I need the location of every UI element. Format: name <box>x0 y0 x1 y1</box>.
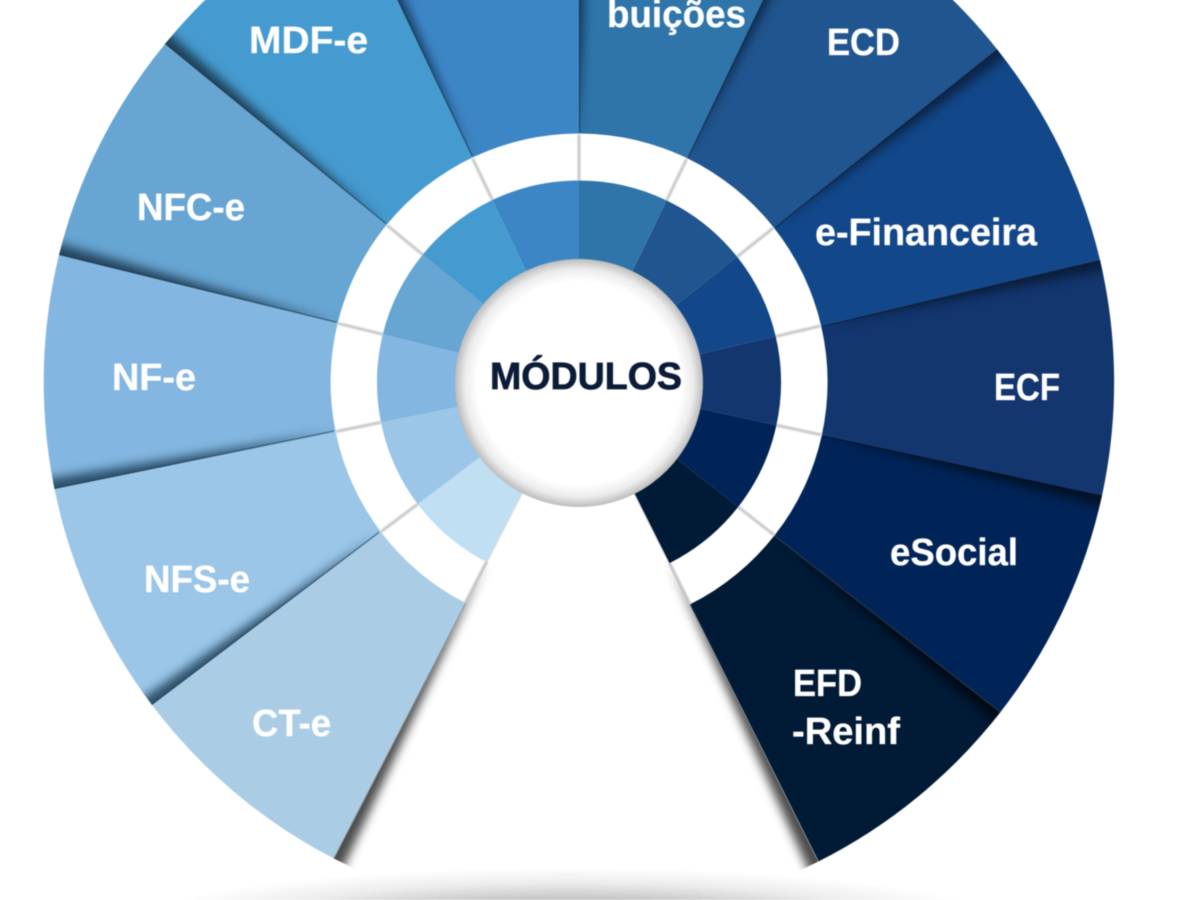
slice: EFD-Reinf: -Reinf <box>792 711 900 753</box>
slice: e-Financeira <box>773 49 1100 326</box>
center hub <box>455 259 703 507</box>
white ring <box>331 133 828 604</box>
slice: MDF-e <box>165 0 473 225</box>
slice: Contribuições <box>579 0 811 159</box>
center hub: MÓDULOS <box>490 354 682 398</box>
slice: CT-e: CT-e <box>252 703 331 745</box>
slice: eSocial: eSocial <box>890 532 1018 574</box>
shadow: edges of open wedge <box>333 493 820 870</box>
slice: NFS-e: NFS-e <box>144 559 250 601</box>
fold shadows between slices <box>26 0 1132 738</box>
ring separator lines <box>336 134 821 604</box>
slice: CT-e <box>152 532 465 858</box>
slice: ECD <box>687 0 997 228</box>
slice: NFS-e <box>54 432 381 705</box>
slice: ECF <box>820 260 1114 496</box>
slice: NF-e <box>44 255 338 489</box>
slice: NFC-e: NFC-e <box>137 187 245 229</box>
inner coloured ring <box>377 180 781 563</box>
slice: EFD-Reinf: EFD <box>793 663 862 705</box>
slice: EFD-Reinf <box>690 535 1000 861</box>
slice: eSocial <box>774 435 1102 712</box>
slice: unlabeled top module <box>349 0 579 158</box>
slice: NF-e: NF-e <box>112 357 196 399</box>
slice: e-Financeira: e-Financeira <box>815 212 1038 254</box>
slice: NFC-e <box>59 44 387 323</box>
ground shadow <box>100 860 1050 900</box>
slice: ECF: ECF <box>994 367 1060 409</box>
slice: ECD: ECD <box>827 22 900 64</box>
slice: MDF-e: MDF-e <box>249 20 368 62</box>
